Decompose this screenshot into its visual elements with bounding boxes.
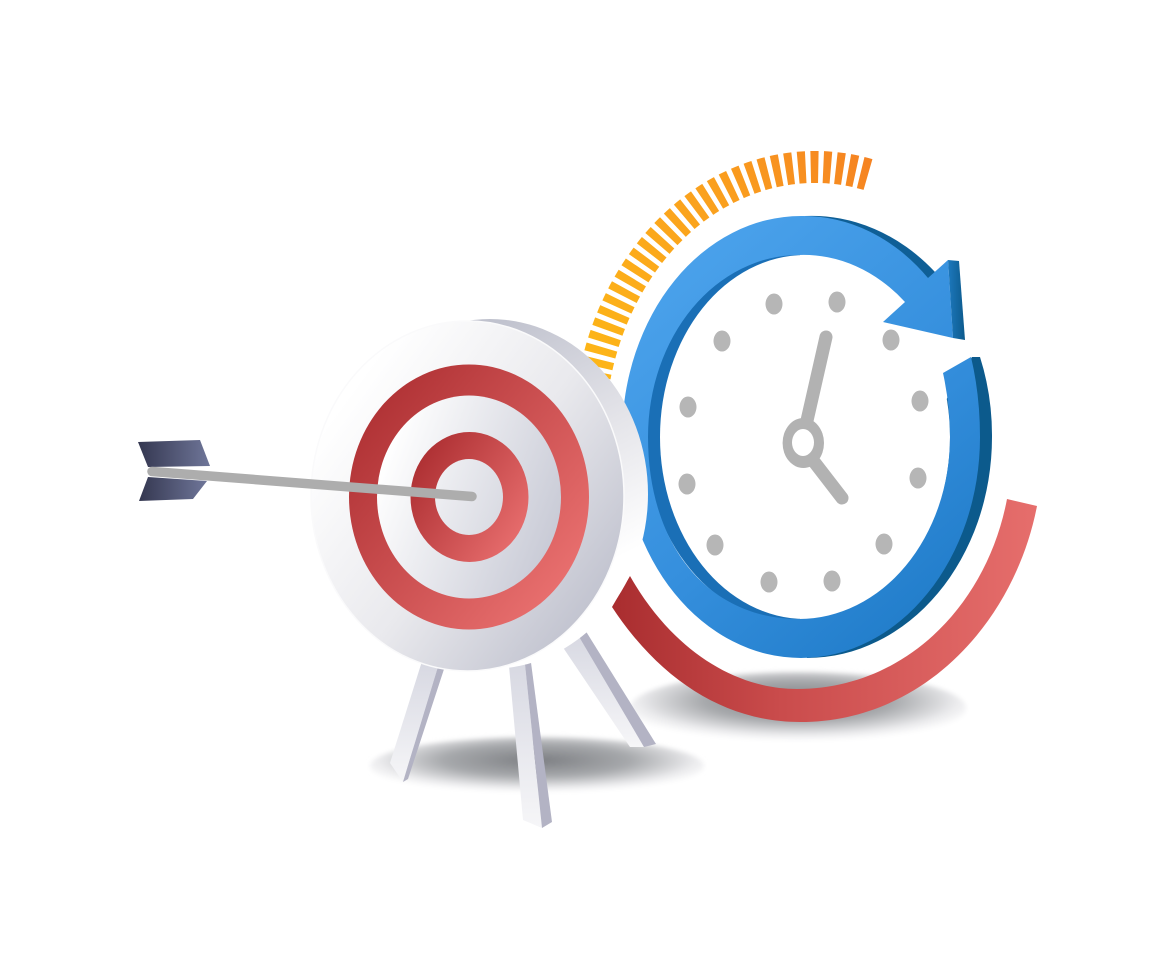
clock face [660, 255, 950, 619]
clock with circular arrow [622, 216, 992, 658]
arrowhead depth [948, 260, 965, 340]
inner red ring [410, 432, 528, 562]
target board [311, 319, 648, 671]
red arc [612, 499, 1037, 722]
board edge [332, 319, 648, 669]
clock hour dots [678, 292, 928, 592]
target shadow [370, 737, 704, 795]
target stand legs [390, 625, 656, 828]
blue arrow outer depth [801, 357, 992, 658]
arrow shaft [152, 472, 472, 496]
bullseye [435, 459, 503, 535]
arrow in target [138, 440, 472, 501]
board face [311, 321, 624, 671]
clock hands [783, 337, 842, 498]
arrow fletching [138, 440, 210, 467]
orange tick arc [595, 167, 868, 376]
outer red ring [349, 364, 589, 630]
clock face inner bevel [645, 250, 800, 624]
blue circular arrow [622, 216, 980, 658]
white ring [377, 396, 561, 598]
clock shadow [630, 672, 966, 744]
